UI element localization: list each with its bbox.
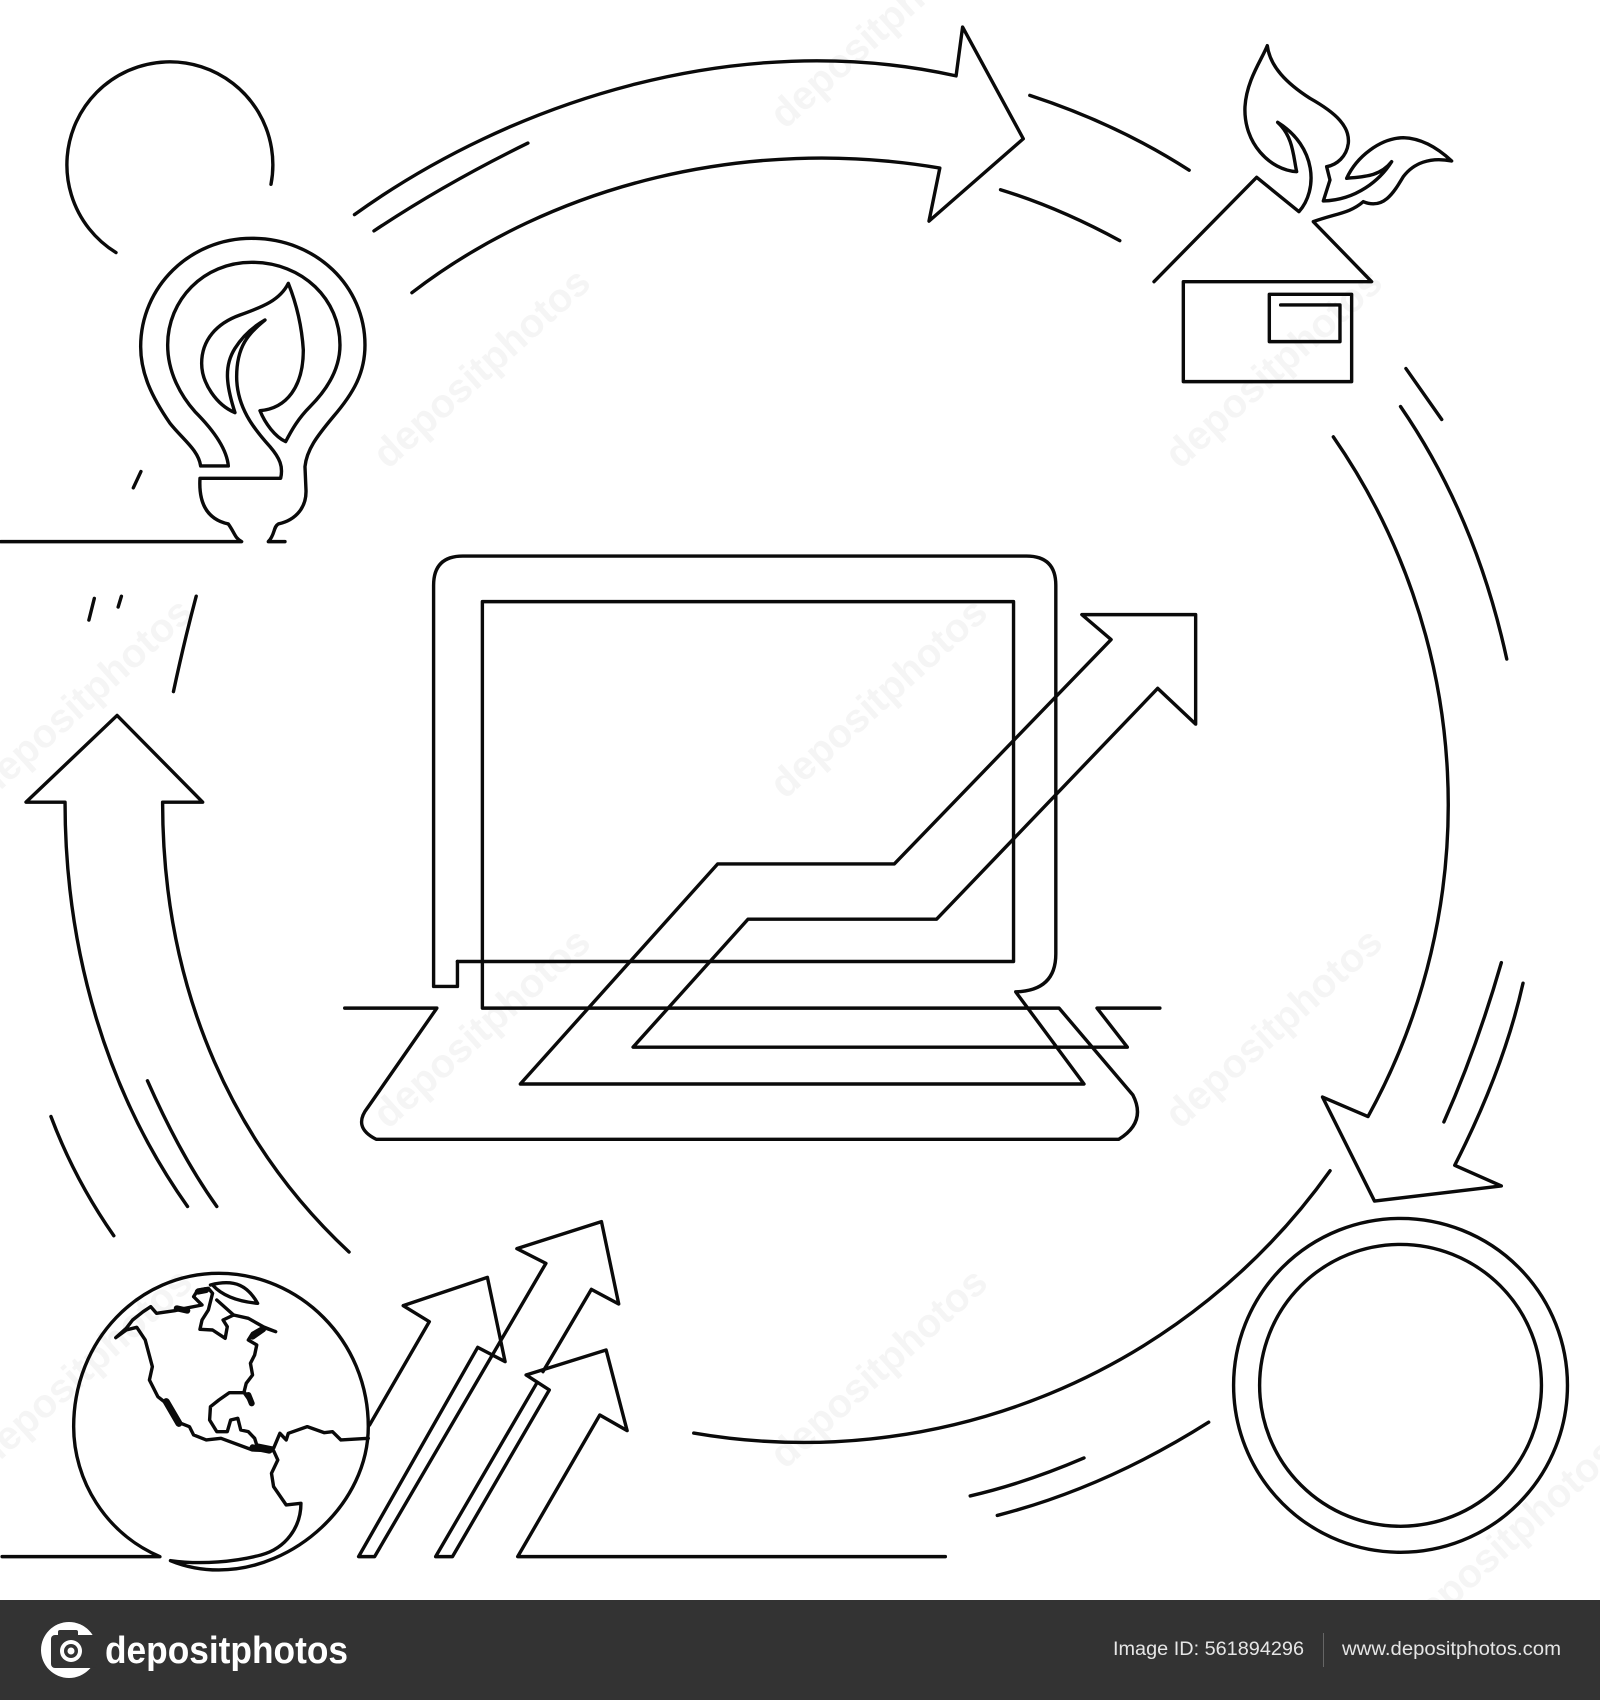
icon: globe with rising arrows — [2, 1222, 945, 1570]
icon: house with leaves — [1154, 46, 1452, 382]
footer bar — [0, 1600, 1600, 1700]
footer logo — [41, 1622, 348, 1678]
small strokes — [89, 472, 196, 692]
sun arc — [67, 62, 273, 253]
icon: camera badge — [41, 1622, 97, 1678]
icon: light bulb with leaf — [1, 238, 365, 542]
watermark: depositphotos — [365, 920, 599, 1137]
watermark: depositphotos — [762, 1260, 996, 1477]
globe outline and Americas — [2, 1273, 368, 1570]
icon: ring — [1234, 1218, 1567, 1552]
laptop with rising arrow — [345, 556, 1196, 1139]
image id: Image ID: 561894296 — [1113, 1639, 1304, 1660]
arrow: right down-pointing — [1322, 369, 1523, 1201]
watermark: depositphotos — [365, 260, 599, 477]
watermark: depositphotos — [1157, 920, 1391, 1137]
website url: www.depositphotos.com — [1341, 1639, 1561, 1660]
watermark: depositphotos — [1157, 260, 1391, 477]
arrow: top right-pointing — [354, 27, 1189, 293]
arrow: left up-pointing — [26, 715, 349, 1252]
rising arrows — [359, 1222, 619, 1557]
arctic island — [210, 1283, 258, 1315]
logo wordmark: depositphotos — [105, 1630, 348, 1672]
bottom arc — [694, 1171, 1330, 1515]
watermark: depositphotos — [762, 590, 996, 807]
